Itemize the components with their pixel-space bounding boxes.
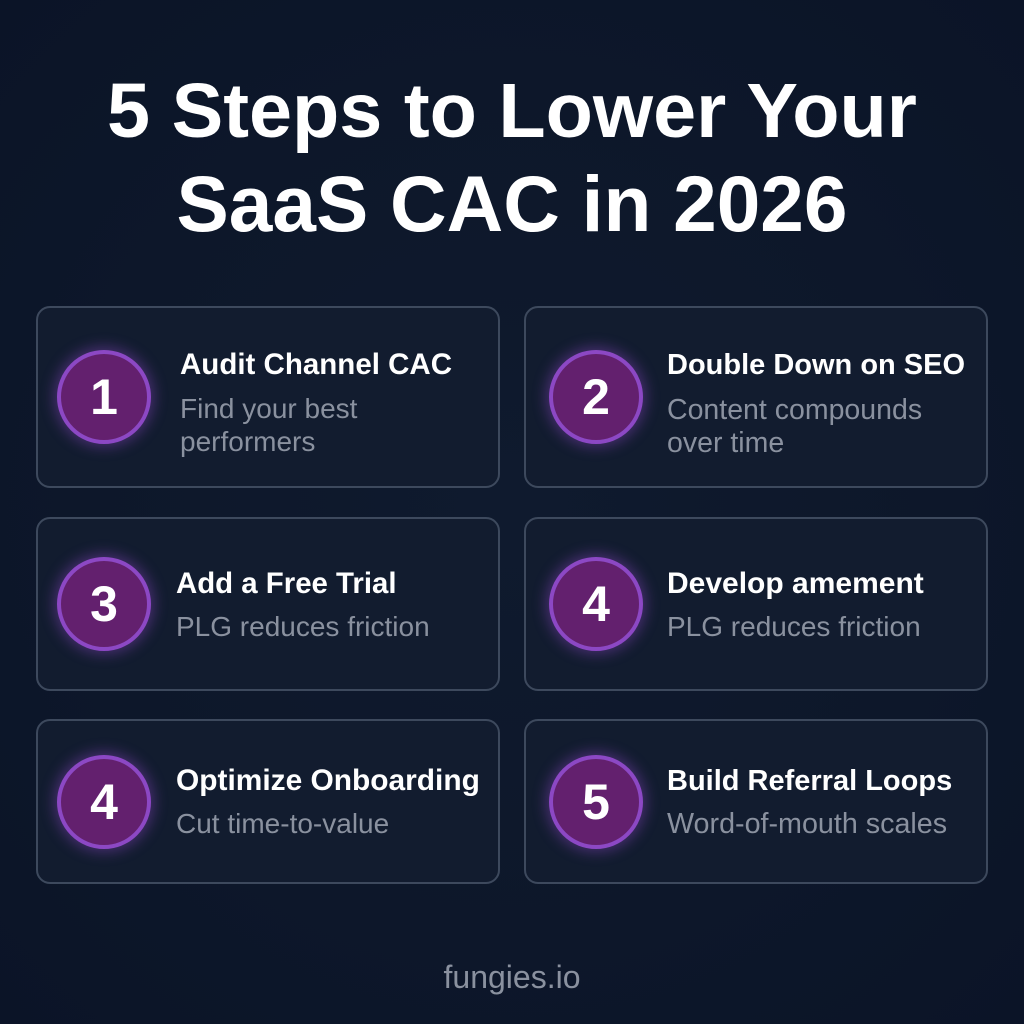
badge: number 3: 3 bbox=[90, 576, 118, 632]
badge: number 4 bbox=[549, 557, 643, 651]
panel: step 4 develop amement bbox=[524, 517, 988, 691]
badge: number 1: 1 bbox=[90, 369, 118, 425]
text: step 1 description bbox=[180, 393, 358, 457]
footer brand: fungies.io bbox=[444, 959, 580, 995]
heading: step 5: Build Referral Loops bbox=[667, 765, 952, 797]
panel: step 4 optimize onboarding bbox=[36, 719, 500, 884]
badge: number 2 bbox=[549, 350, 643, 444]
badge: number 4: 4 bbox=[90, 774, 118, 830]
text: optimize onboarding description: Cut time-to-value bbox=[176, 808, 389, 839]
text: step 2 description: Content compounds bbox=[667, 394, 922, 426]
panel: step 5 build referral loops bbox=[524, 719, 988, 884]
text: step 1 description: Find your best bbox=[180, 393, 357, 424]
badge: number 2: 2 bbox=[582, 369, 610, 425]
panel: step 1 audit channel CAC bbox=[36, 306, 500, 488]
heading: step 4: Develop amement bbox=[667, 567, 924, 600]
heading: step 1: Audit Channel CAC bbox=[180, 348, 452, 381]
text: step 5 description: Word-of-mouth scales bbox=[667, 808, 947, 840]
heading: optimize onboarding: Optimize Onboarding bbox=[176, 764, 480, 797]
panel: step 3 add a free trial bbox=[36, 517, 500, 691]
title: SaaS CAC in 2026 bbox=[176, 160, 848, 248]
heading: step 3: Add a Free Trial bbox=[176, 567, 397, 600]
text: step 2 description bbox=[667, 394, 922, 459]
badge: number 3 bbox=[57, 557, 151, 651]
panel: step 2 double down on SEO bbox=[524, 306, 988, 488]
title: 5 Steps to Lower Your bbox=[107, 68, 917, 154]
text: step 2 description: over time bbox=[667, 427, 784, 459]
badge: number 4 bbox=[57, 755, 151, 849]
badge: number 4: 4 bbox=[582, 576, 610, 632]
text: step 1 description: performers bbox=[180, 426, 315, 457]
badge: number 5: 5 bbox=[582, 774, 610, 830]
text: step 4 description: PLG reduces friction bbox=[667, 611, 921, 642]
text: step 3 description: PLG reduces friction bbox=[176, 611, 430, 642]
title bbox=[107, 68, 917, 248]
badge: number 5 bbox=[549, 755, 643, 849]
badge: number 1 bbox=[57, 350, 151, 444]
heading: step 2: Double Down on SEO bbox=[667, 349, 965, 381]
